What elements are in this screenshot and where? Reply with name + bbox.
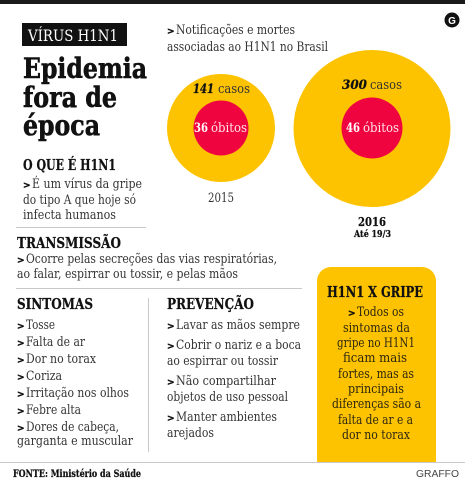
section: Transmissão: > <box>17 256 25 266</box>
section: Sintomas <box>17 296 134 449</box>
section: Prevenção: Manter ambientes <box>176 410 277 425</box>
chart: circles 2016 <box>294 50 450 240</box>
panel: H1N1 x gripe: principais <box>348 382 404 397</box>
section: Sintomas: Tosse <box>26 318 55 333</box>
icon: G logo <box>444 12 460 28</box>
panel: H1N1 x gripe: > <box>348 309 356 319</box>
chart: circles 2016: Até 19/3 <box>353 229 391 240</box>
section: Sintomas: > <box>17 322 25 332</box>
chart: circles 2016: 46 <box>346 121 360 136</box>
section: Sintomas: > <box>17 356 25 366</box>
chart: circles 2015: 36 <box>194 121 208 136</box>
section: Sintomas: Dor no torax <box>26 352 97 367</box>
chart: circles 2016: 300 <box>342 78 367 93</box>
chart: circles 2016: 2016 <box>358 214 386 229</box>
title: fora de <box>23 81 117 114</box>
chart: circles 2015: 141 <box>193 82 214 97</box>
panel: H1N1 x gripe: Todos os <box>357 305 404 320</box>
chart: circles 2015 <box>167 74 275 206</box>
section: Sintomas: > <box>17 424 25 434</box>
section: Transmissão: Ocorre pelas secreções das vias respiratórias, <box>26 252 277 267</box>
section: Transmissão: ao falar, espirrar ou tossir, e pelas mãos <box>17 267 238 282</box>
panel: H1N1 x gripe: falta de ar e a <box>338 413 413 428</box>
section: Sintomas: Coriza <box>26 369 62 384</box>
section: Prevenção: > <box>167 322 175 332</box>
panel: H1N1 x gripe: fortes, mas as <box>338 367 414 382</box>
icon: G logo: G <box>448 16 456 27</box>
section: O que é H1N1 <box>23 156 142 223</box>
section: Prevenção: > <box>167 378 175 388</box>
section: Sintomas: SINTOMAS <box>17 296 93 313</box>
source: FONTE: Ministério da Saúde <box>13 469 141 480</box>
panel: H1N1 x gripe: diferenças são a <box>332 397 421 412</box>
chart: circles 2015: casos <box>218 82 250 97</box>
section: Sintomas: > <box>17 407 25 417</box>
title: Epidemia <box>23 52 147 85</box>
section: Sintomas: > <box>17 390 25 400</box>
chart: circles 2016: óbitos <box>363 121 399 136</box>
section: Prevenção: PREVENÇÃO <box>167 294 254 313</box>
section: O que é H1N1: O QUE É H1N1 <box>23 156 116 174</box>
chart: circles 2015: 2015 <box>208 191 234 206</box>
panel: H1N1 x gripe: H1N1 X GRIPE <box>327 284 423 301</box>
section: Prevenção: arejados <box>167 426 214 441</box>
chart: circles 2015: óbitos <box>211 121 247 136</box>
section: O que é H1N1: É um vírus da gripe <box>32 176 142 192</box>
section: Sintomas: Febre alta <box>26 403 81 418</box>
section: Transmissão <box>17 233 277 282</box>
tag: Vírus H1N1: VÍRUS H1N1 <box>27 25 118 45</box>
section: Prevenção: objetos de uso pessoal <box>167 390 288 405</box>
section: Transmissão: TRANSMISSÃO <box>17 233 121 252</box>
title: época <box>23 109 100 142</box>
section: Prevenção <box>167 294 301 441</box>
panel: H1N1 x gripe: ficam mais <box>343 351 407 366</box>
chart caption: Notificações e mortes <box>176 23 295 38</box>
section: O que é H1N1: do tipo A que hoje só <box>23 193 136 208</box>
panel: H1N1 x gripe: dor no torax <box>342 428 411 443</box>
section: O que é H1N1: infecta humanos <box>23 208 116 223</box>
chart: circles 2016: casos <box>370 78 402 93</box>
section: Sintomas: Falta de ar <box>26 335 86 350</box>
section: Prevenção: ao espirrar ou tossir <box>167 354 279 369</box>
chart caption <box>167 23 328 55</box>
section: Sintomas: > <box>17 339 25 349</box>
title <box>23 52 147 142</box>
section: Prevenção: Não compartilhar <box>176 374 277 389</box>
section: Sintomas: garganta e muscular <box>17 434 134 449</box>
panel: H1N1 x gripe: gripe no H1N1 <box>337 336 415 351</box>
chart caption: > <box>167 27 175 37</box>
credit: GRAFFO <box>416 468 459 480</box>
panel: H1N1 x gripe: sintomas da <box>343 321 410 336</box>
section: Sintomas: Dores de cabeça, <box>26 420 119 435</box>
panel: H1N1 x gripe <box>317 267 436 462</box>
section: Sintomas: Irritação nos olhos <box>26 386 129 401</box>
section: Prevenção: Lavar as mãos sempre <box>176 318 300 333</box>
section: Prevenção: Cobrir o nariz e a boca <box>176 338 301 353</box>
section: Prevenção: > <box>167 414 175 424</box>
section: Prevenção: > <box>167 342 175 352</box>
chart caption: associadas ao H1N1 no Brasil <box>167 40 328 55</box>
section: Sintomas: > <box>17 373 25 383</box>
section: O que é H1N1: > <box>23 181 31 191</box>
